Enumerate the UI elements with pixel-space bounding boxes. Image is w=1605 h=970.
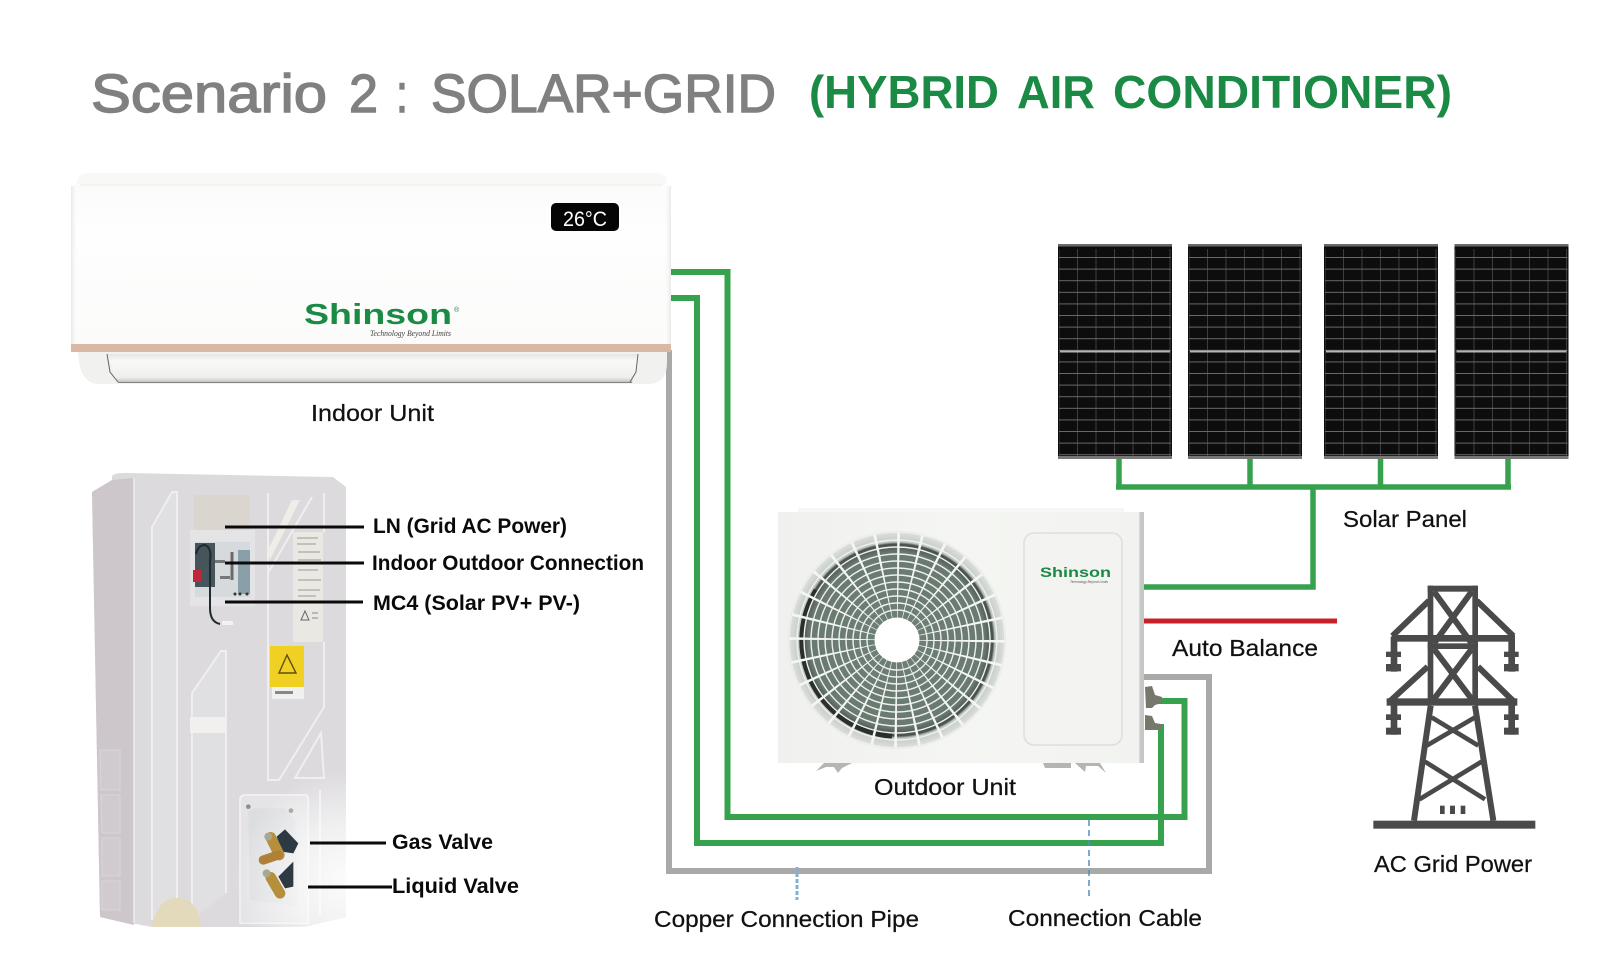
leader: connection cable (1088, 820, 1090, 900)
title: scenario: 2 (349, 64, 378, 124)
outdoor unit rear photo (92, 473, 346, 927)
callout: LN (Grid AC Power) (225, 515, 567, 538)
solar panel 3 (1324, 244, 1438, 459)
solar panel 2 (1188, 244, 1302, 459)
callout: Gas Valve (310, 831, 493, 854)
label: copper connection pipe: Copper Connection Pipe (654, 906, 919, 932)
wiring box (190, 530, 255, 625)
display: 26°C (551, 203, 619, 231)
title: scenario: Scenario (91, 64, 327, 124)
tape (190, 717, 225, 733)
warning label (270, 646, 304, 699)
label: solar panel: Solar Panel (1343, 506, 1467, 532)
callout: Liquid Valve: Liquid Valve (392, 875, 519, 898)
display: 26°C: 26°C (563, 208, 607, 231)
title: scenario: SOLAR+GRID (431, 64, 776, 124)
label: connection cable: Connection Cable (1008, 905, 1202, 931)
callout: LN (Grid AC Power): LN (Grid AC Power) (373, 515, 567, 538)
connection cable (green, upper) (671, 272, 1184, 817)
title: hybrid air conditioner: AIR (1017, 66, 1095, 118)
title: scenario: : (396, 64, 408, 124)
valve compartment (240, 795, 308, 923)
service window (194, 495, 250, 532)
leader: copper connection pipe (796, 867, 798, 900)
left side panel (92, 478, 134, 925)
liquid valve (263, 862, 293, 893)
side panel: Shinson (1040, 564, 1111, 580)
fan hub (874, 618, 920, 662)
brass service valves (263, 829, 298, 893)
solar panel 4 (1454, 244, 1568, 459)
title: hybrid air conditioner: CONDITIONER) (1113, 66, 1452, 118)
gas valve (263, 829, 298, 860)
label: indoor unit: Indoor Unit (311, 400, 435, 426)
callout: MC4 (Solar PV+ PV-) (225, 592, 580, 615)
label: AC grid power: AC Grid Power (1374, 851, 1532, 877)
indoor unit (71, 173, 671, 384)
label: outdoor unit: Outdoor Unit (874, 774, 1017, 800)
icon: transmission tower (1373, 586, 1535, 829)
brand logo: ® (454, 306, 460, 314)
callout: MC4 (Solar PV+ PV-): MC4 (Solar PV+ PV-) (373, 592, 580, 615)
callout: Indoor Outdoor Connection: Indoor Outdoor Connection (372, 552, 644, 575)
brand logo: Shinson (304, 299, 452, 331)
rating label (293, 532, 323, 642)
callout: Liquid Valve (308, 875, 519, 898)
label: auto balance: Auto Balance (1172, 635, 1318, 661)
auto balance line (red) (1144, 618, 1337, 624)
title: hybrid air conditioner: (HYBRID (809, 66, 999, 118)
service valves (1145, 686, 1162, 729)
callout: Gas Valve: Gas Valve (392, 831, 493, 854)
brand logo: Technology Beyond Limits (370, 329, 451, 338)
drain elbow (152, 898, 201, 927)
embossed ribs (152, 492, 324, 920)
fan grille (788, 531, 1006, 749)
copper connection pipe (grey) (669, 350, 1209, 871)
side panel (1024, 533, 1122, 745)
solar wiring (1116, 459, 1511, 587)
connection cable (green, lower) (671, 298, 1161, 843)
side panel: Technology Beyond Limits (1070, 579, 1108, 584)
feet (816, 763, 1106, 773)
copper trim stripe (71, 344, 671, 352)
brand logo (304, 299, 460, 338)
solar panel 1 (1058, 244, 1172, 459)
callout: Indoor Outdoor Connection (225, 552, 644, 575)
outdoor unit (778, 508, 1162, 773)
